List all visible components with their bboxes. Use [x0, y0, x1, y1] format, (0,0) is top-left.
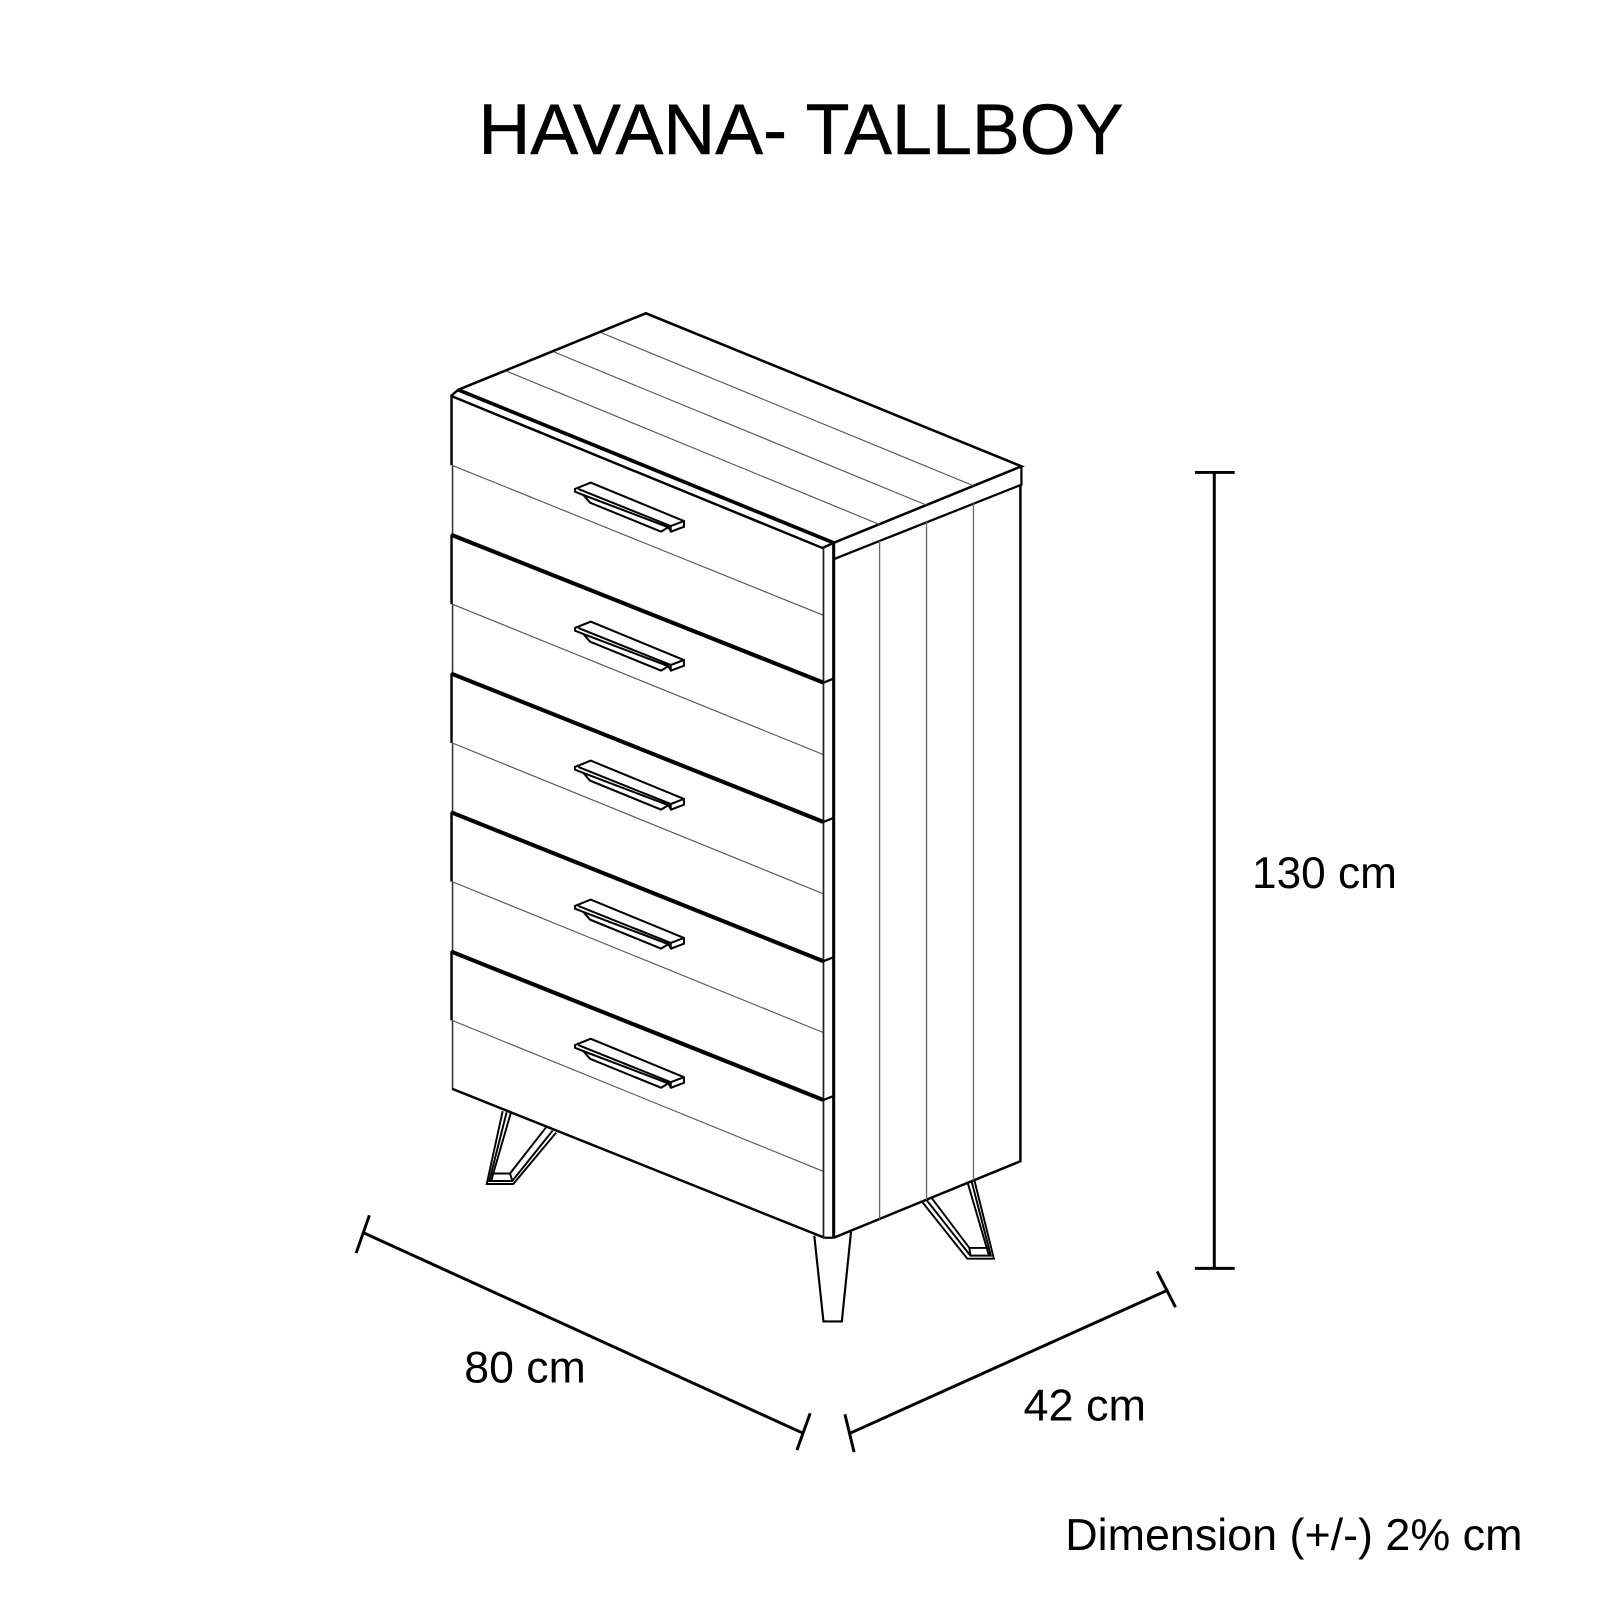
- front centre leg: [814, 1232, 851, 1321]
- depth dimension line: [845, 1271, 1176, 1452]
- drawer handle 2: [575, 622, 684, 671]
- drawer handle 1: [575, 483, 684, 532]
- drawer handle 3: [575, 761, 684, 810]
- back legs: left hairpin leg: [487, 1111, 556, 1184]
- title: HAVANA- TALLBOY: [479, 90, 1123, 170]
- front drawers: [451, 395, 834, 1238]
- depth label: 42 cm: [1023, 1379, 1146, 1430]
- height label: 130 cm: [1252, 847, 1397, 898]
- side panel: [834, 485, 1020, 1238]
- width label: 80 cm: [464, 1342, 586, 1393]
- drawer handle 5: [575, 1039, 684, 1088]
- top panel: [451, 313, 1021, 559]
- tallboy drawing: [451, 313, 1021, 1321]
- height dimension line: [1195, 472, 1235, 1268]
- drawer handle 4: [575, 900, 684, 949]
- tolerance note: Dimension (+/-) 2% cm: [1065, 1509, 1522, 1560]
- back legs: right hairpin leg: [921, 1181, 994, 1259]
- width dimension line: [356, 1215, 810, 1450]
